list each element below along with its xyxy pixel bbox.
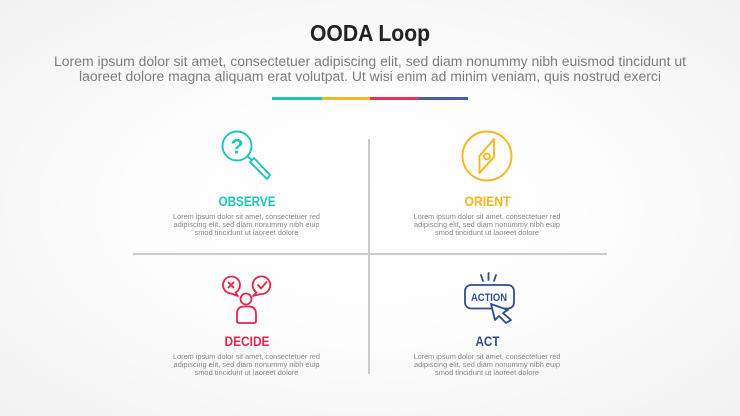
body text: smod tincidunt ut laoreet dolore [435,370,539,377]
icon: person with speech bubbles [223,276,270,323]
body text: Lorem ipsum dolor sit amet, consectetuer red [414,354,561,361]
body text: smod tincidunt ut laoreet dolore [194,370,299,377]
body text: adipiscing elit, sed diam nonummy nibh euip [414,362,560,369]
subtitle text block [54,54,686,84]
body text: smod tincidunt ut laoreet dolore [435,230,539,237]
body text: adipiscing elit, sed diam nonummy nibh euip [414,222,560,229]
body text: Lorem ipsum dolor sit amet, consectetuer red [173,214,320,221]
quadrant cross lines [133,139,607,374]
panel: decide [173,276,320,377]
icon: action button with cursor [465,273,514,323]
icon: compass [462,132,512,180]
heading: ACT [476,334,500,349]
body text: Lorem ipsum dolor sit amet, consectetuer red [414,214,561,221]
body text [173,354,320,377]
heading: ORIENT [464,194,511,209]
icon: action button with cursor: ACTION [471,292,507,304]
colour divider bar [272,97,468,100]
heading: DECIDE [224,334,270,349]
body text: Lorem ipsum dolor sit amet, consectetuer red [173,354,320,361]
subtitle text block: laoreet dolore magna aliquam erat volutpat. Ut wisi enim ad minim veniam, quis nostrud exerci [79,69,661,84]
icon: magnifying glass with question mark [222,132,270,179]
panel: orient [414,132,561,237]
body text [414,354,561,377]
heading: OBSERVE [218,194,276,209]
title: OODA Loop [310,20,430,46]
body text [173,214,320,237]
body text [414,214,561,237]
panel: observe [173,132,320,237]
body text: adipiscing elit, sed diam nonummy nibh euip [174,222,320,229]
body text: smod tincidunt ut laoreet dolore [194,230,299,237]
body text: adipiscing elit, sed diam nonummy nibh euip [174,362,320,369]
icon: magnifying glass with question mark: ? [231,136,243,158]
subtitle text block: Lorem ipsum dolor sit amet, consectetuer adipiscing elit, sed diam nonummy nibh euismod tincidunt ut [54,54,686,69]
panel: act [414,273,561,377]
